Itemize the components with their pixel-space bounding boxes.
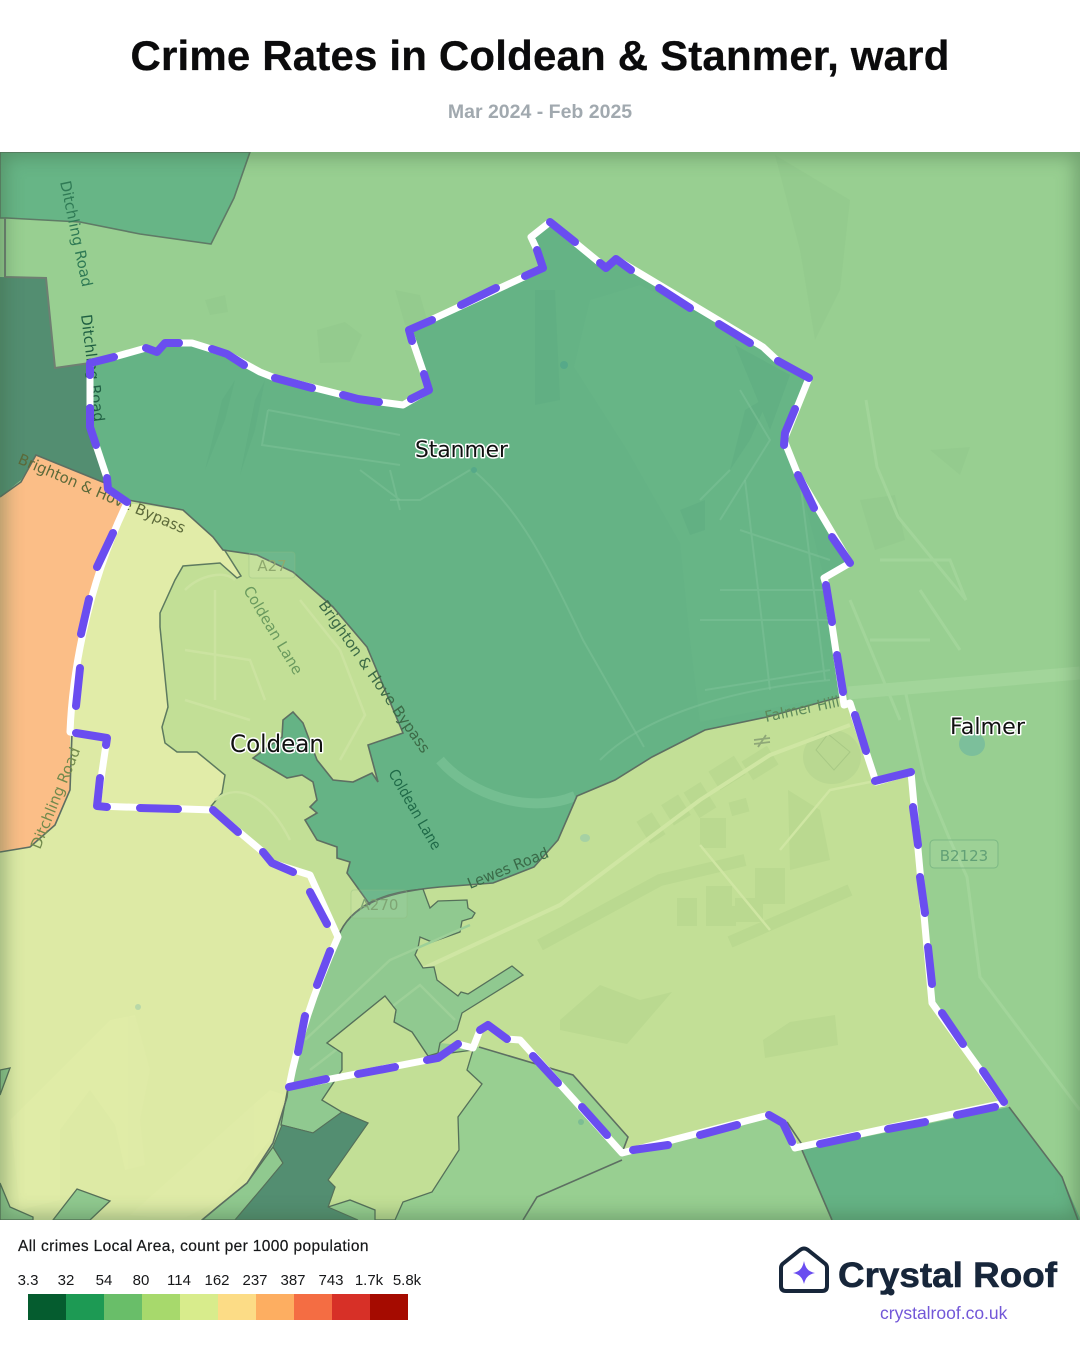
region: left dark green area	[0, 277, 108, 497]
Stanmer darker woodland patches	[205, 290, 790, 535]
road badge: B2123: B2123	[940, 847, 988, 865]
road labels: Brighton & Hove Bypass	[315, 597, 434, 757]
outline: dark area edge	[5, 218, 90, 368]
region: dark green south	[235, 1112, 368, 1220]
choropleth map	[0, 152, 1080, 1220]
legend tick labels: 1.7k	[355, 1272, 383, 1289]
map edge shading	[0, 152, 1080, 1220]
region outlines	[0, 455, 1078, 1220]
Hollingdean roads	[305, 925, 470, 1070]
legend	[18, 1238, 422, 1320]
legend tick labels: 5.8k	[393, 1272, 421, 1289]
place labels: Stanmer	[415, 438, 509, 463]
road labels: Ditchling Road	[27, 745, 84, 851]
legend tick labels: 3.3	[18, 1272, 38, 1289]
road badge: B2123	[930, 840, 998, 868]
legend tick labels: 743	[318, 1272, 344, 1289]
Falmer ward: campus plots	[560, 746, 838, 1058]
water: small ponds	[135, 361, 985, 1125]
legend tick labels: 32	[58, 1272, 74, 1289]
region: Stanmer ward dark green	[90, 222, 850, 905]
road labels: Falmer Hill	[763, 693, 841, 726]
region: pale lighter patches	[10, 1015, 285, 1220]
icon: house with star	[779, 1246, 829, 1293]
road badge: A270	[351, 890, 407, 918]
region: top-left green area	[0, 152, 250, 244]
region: Hollingdean mid green	[281, 889, 523, 1133]
Coldean estate roads	[185, 575, 365, 840]
Falmer ward: stadium	[803, 730, 861, 784]
region: Coldean pale west part	[70, 503, 241, 810]
legend tick labels: 162	[204, 1272, 230, 1289]
east roads	[848, 400, 1080, 1110]
road labels	[15, 179, 841, 893]
legend tick labels: 387	[280, 1272, 306, 1289]
legend tick labels: 80	[133, 1272, 149, 1289]
ward boundary: purple dashes	[76, 222, 1004, 1150]
Crystal Roof branding	[779, 1246, 1058, 1323]
road labels: Coldean Lane	[385, 766, 445, 853]
icon: railway station	[754, 735, 770, 747]
title: Crime Rates in Coldean & Stanmer, ward	[130, 32, 950, 79]
legend tick labels: 237	[242, 1272, 268, 1289]
region: pale yellow area south-west	[0, 732, 338, 1220]
Falmer ward: rail and road lines	[420, 725, 880, 970]
road labels: Ditchling Road	[56, 179, 96, 288]
base area: light green	[0, 152, 1080, 1220]
road badge: A27: A27	[257, 557, 287, 575]
legend tick labels: 114	[167, 1272, 191, 1289]
date range subtitle: Mar 2024 - Feb 2025	[448, 101, 632, 123]
region: yellow south of ward	[322, 996, 482, 1220]
Stanmer roads	[262, 390, 830, 803]
legend tick labels: 54	[96, 1272, 112, 1289]
ward boundary: white line	[70, 222, 1004, 1153]
region: south-east green	[802, 1107, 1080, 1220]
place labels	[230, 438, 1026, 758]
region: Falmer ward yellow-green	[288, 697, 1004, 1153]
road badge: A270: A270	[360, 896, 398, 914]
place labels: Coldean	[230, 730, 324, 758]
legend tick labels	[18, 1272, 422, 1289]
legend title: All crimes Local Area, count per 1000 population	[18, 1238, 369, 1255]
road labels: Lewes Road	[465, 844, 551, 893]
road badge: A27	[249, 552, 295, 578]
website link: crystalroof.co.uk	[880, 1303, 1007, 1323]
terrain patches on base area	[205, 155, 970, 550]
region: Coldean ward yellow	[128, 500, 420, 937]
road labels: Brighton & Hove Bypass	[15, 450, 188, 537]
region: Stanmer lighter fields	[574, 285, 840, 722]
logo wordmark: Crystal Roof	[838, 1256, 1057, 1295]
legend colour bar	[28, 1294, 408, 1320]
road labels: Coldean Lane	[240, 583, 307, 678]
road labels: Ditchling Road	[77, 313, 108, 423]
outline: Coldean inner edge	[160, 546, 241, 810]
region: small west-edge green pieces	[0, 1068, 283, 1220]
place labels: Falmer	[950, 715, 1026, 740]
region: orange high crime area	[0, 455, 127, 852]
